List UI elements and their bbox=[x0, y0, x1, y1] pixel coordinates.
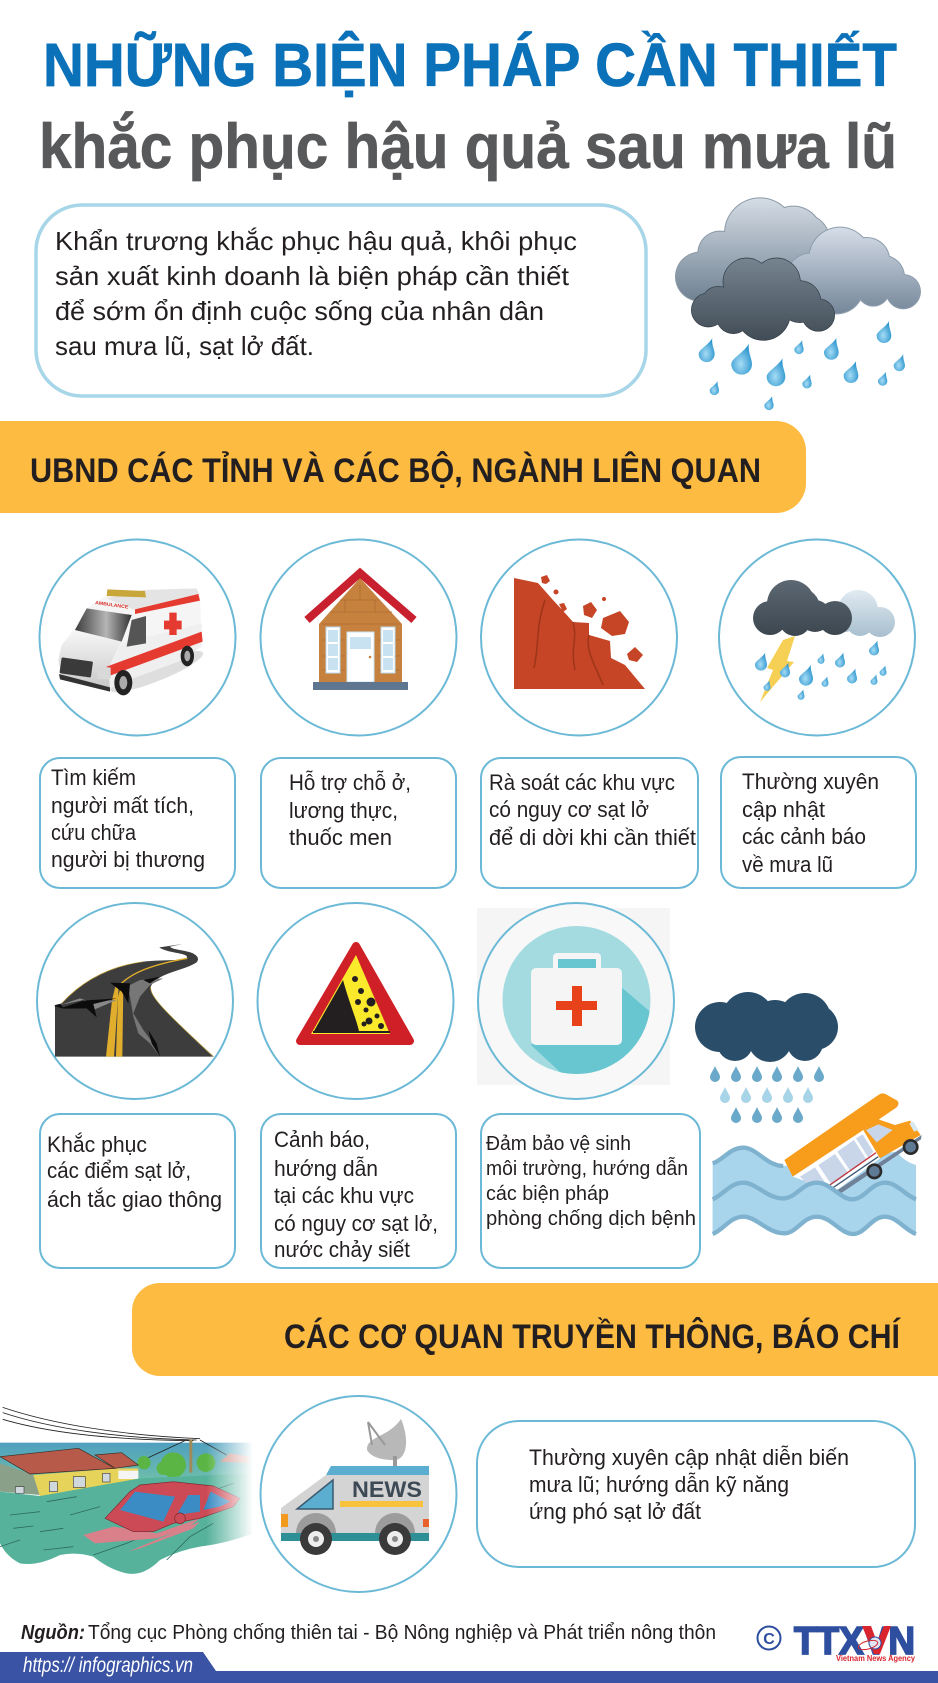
card: flood warnings: về mưa lũ bbox=[742, 852, 833, 877]
panel: intro text: Khẩn trương khắc phục hậu quả, khôi phục bbox=[55, 226, 577, 256]
heading band: provinces and ministries: UBND CÁC TỈNH VÀ CÁC BỘ, NGÀNH LIÊN QUAN bbox=[30, 450, 761, 490]
card: flood warnings: các cảnh báo bbox=[742, 824, 866, 849]
panel: intro text bbox=[36, 205, 646, 396]
card: sanitation and disease prevention: các biện pháp bbox=[486, 1183, 609, 1205]
card: review risk areas: Rà soát các khu vực bbox=[489, 770, 675, 795]
card: warnings and guidance: nước chảy siết bbox=[274, 1237, 410, 1262]
card: sanitation and disease prevention: phòng chống dịch bệnh bbox=[486, 1208, 696, 1230]
card: review risk areas: để di dời khi cần thiết bbox=[489, 825, 696, 850]
card: media task: mưa lũ; hướng dẫn kỹ năng bbox=[529, 1472, 789, 1497]
card: media task: Thường xuyên cập nhật diễn biến bbox=[529, 1445, 849, 1470]
card: sanitation and disease prevention: môi trường, hướng dẫn bbox=[486, 1157, 688, 1180]
circle icon: storm bbox=[719, 540, 915, 736]
source line: Tổng cục Phòng chống thiên tai - Bộ Nông nghiệp và Phát triển nông thôn bbox=[88, 1622, 716, 1644]
footer bar with website: https:// infographics.vn bbox=[23, 1654, 193, 1677]
card: review risk areas bbox=[481, 758, 698, 888]
card: fix landslide points: ách tắc giao thông bbox=[47, 1187, 222, 1212]
card: warnings and guidance: Cảnh báo, bbox=[274, 1127, 370, 1152]
circle icon: ambulance: AMBULANCE bbox=[95, 600, 129, 610]
card: search and rescue bbox=[40, 758, 235, 888]
card: shelter and food: thuốc men bbox=[289, 825, 392, 850]
illustration: flooded house and car bbox=[0, 1407, 263, 1577]
card: flood warnings: cập nhật bbox=[742, 797, 825, 822]
card: search and rescue: người mất tích, bbox=[51, 793, 194, 818]
title bbox=[39, 31, 897, 182]
card: warnings and guidance: hướng dẫn bbox=[274, 1156, 378, 1181]
panel: intro text: sản xuất kinh doanh là biện pháp cần thiết bbox=[55, 261, 570, 291]
circle icon: news van bbox=[260, 1396, 456, 1592]
card: shelter and food bbox=[261, 758, 456, 888]
circle icon: damaged road bbox=[37, 903, 233, 1099]
card: fix landslide points: các điểm sạt lở, bbox=[47, 1158, 191, 1183]
card: search and rescue: cứu chữa bbox=[51, 820, 137, 845]
circle icon: brick house bbox=[260, 540, 456, 736]
source line: Nguồn: bbox=[21, 1622, 85, 1644]
logo: TTXVN: C bbox=[763, 1631, 775, 1648]
card: media task: ứng phó sạt lở đất bbox=[529, 1499, 701, 1524]
card: fix landslide points: Khắc phục bbox=[47, 1132, 147, 1157]
logo: TTXVN: TTXVN bbox=[794, 1620, 915, 1663]
card: media task bbox=[477, 1421, 915, 1567]
panel: intro text: để sớm ổn định cuộc sống của nhân dân bbox=[55, 296, 544, 326]
icon: navy cloud with rain bbox=[695, 992, 838, 1123]
circle icon: first aid kit bbox=[477, 903, 674, 1100]
circle icon: ambulance bbox=[40, 540, 236, 736]
icon: rain clouds bbox=[675, 197, 921, 410]
card: fix landslide points bbox=[40, 1114, 235, 1268]
heading band: media and press bbox=[132, 1283, 938, 1376]
card: review risk areas: có nguy cơ sạt lở bbox=[489, 797, 649, 822]
card: flood warnings: Thường xuyên bbox=[742, 769, 879, 794]
logo: TTXVN: Vietnam News Agency bbox=[836, 1653, 915, 1663]
card: warnings and guidance: có nguy cơ sạt lở, bbox=[274, 1211, 438, 1236]
card: shelter and food: lương thực, bbox=[289, 798, 398, 823]
card: sanitation and disease prevention: Đảm bảo vệ sinh bbox=[486, 1133, 631, 1155]
circle icon: falling rocks sign bbox=[258, 903, 454, 1099]
circle icon: landslide bbox=[481, 540, 677, 736]
title: NHỮNG BIỆN PHÁP CẦN THIẾT bbox=[43, 31, 897, 99]
card: search and rescue: người bị thương bbox=[51, 847, 205, 872]
card: search and rescue: Tìm kiếm bbox=[51, 765, 136, 790]
panel: intro text: sau mưa lũ, sạt lở đất. bbox=[55, 331, 314, 361]
card: flood warnings bbox=[721, 757, 916, 888]
card: sanitation and disease prevention bbox=[481, 1114, 700, 1268]
icon: bus in flood bbox=[713, 1093, 922, 1234]
footer bar with website bbox=[0, 1652, 938, 1683]
card: warnings and guidance: tại các khu vực bbox=[274, 1183, 414, 1208]
circle icon: news van: NEWS bbox=[352, 1477, 422, 1502]
card: warnings and guidance bbox=[261, 1114, 456, 1268]
title: khắc phục hậu quả sau mưa lũ bbox=[39, 111, 897, 182]
heading band: provinces and ministries bbox=[0, 421, 806, 513]
card: shelter and food: Hỗ trợ chỗ ở, bbox=[289, 770, 411, 795]
